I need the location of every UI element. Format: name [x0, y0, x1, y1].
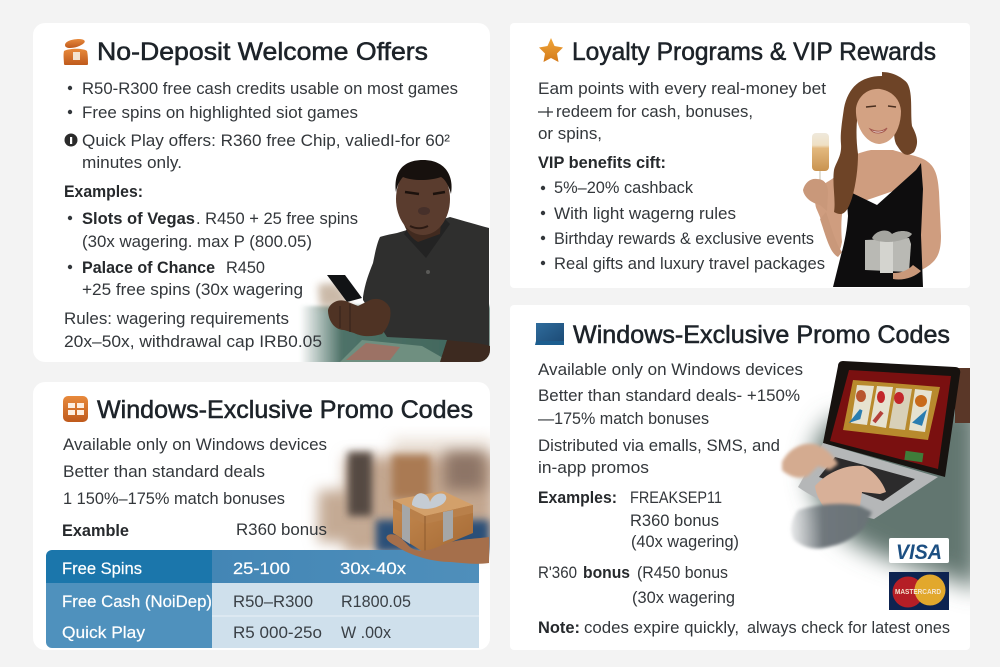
VIP benefits list: VIP benefits cift: [538, 154, 666, 172]
VIP benefits list [538, 154, 825, 273]
table row: free spins: 25-100 [233, 559, 290, 578]
icon: orange windows tile [63, 396, 88, 422]
VIP benefits list: Birthday rewards & exclusive events [554, 230, 814, 248]
title: Loyalty Programs & VIP Rewards [572, 38, 936, 66]
examples: R'360 [538, 564, 577, 582]
table row: free spins [62, 559, 407, 578]
quick play note: Quick Play offers: R360 free Chip, valiedI-for 60² [82, 132, 451, 150]
examples: FREAKSEP11 [630, 489, 722, 507]
note [538, 619, 950, 637]
icon: orange cash pouch [64, 39, 88, 65]
illustration: blurred room background [318, 438, 495, 552]
panel: loyalty programs and VIP rewards [510, 23, 970, 288]
illustration: woman with champagne and gift [803, 72, 941, 287]
title: No-Deposit Welcome Offers [97, 38, 428, 66]
examples: Slots of Vegas [82, 210, 195, 228]
example row [62, 521, 327, 540]
body copy: —175% match bonuses [538, 410, 709, 428]
example row: R360 bonus [236, 521, 327, 539]
examples: Examples: [64, 183, 143, 201]
table row: free cash: R50–R300 [233, 593, 313, 611]
bullet list: Free spins on highlighted siot games [82, 104, 358, 122]
VIP benefits list: With light wagerng rules [554, 205, 736, 223]
icon: info badge [64, 134, 78, 146]
examples [538, 489, 739, 607]
earn points copy [538, 80, 826, 143]
body copy: Available only on Windows devices [63, 436, 327, 454]
examples: (30x wagering. max P (800.05) [82, 233, 312, 251]
examples: bonus [583, 564, 630, 582]
VIP benefits list: 5%–20% cashback [554, 179, 694, 197]
illustration: man using phone at card table [300, 160, 490, 366]
body copy: in-app promos [538, 459, 649, 477]
earn points copy: redeem for cash, bonuses, [556, 103, 753, 121]
bullet list [68, 80, 458, 122]
earn points copy: or spins, [538, 125, 602, 143]
table row: free cash: Free Cash (NoiDep) [62, 592, 212, 611]
body copy [63, 436, 327, 508]
note: always check for latest ones [747, 619, 950, 637]
body copy: Better than standard deals [63, 463, 265, 481]
body copy: Distributed via emalls, SMS, and [538, 437, 780, 455]
table [46, 550, 479, 648]
VIP benefits list: Real gifts and luxury travel packages [554, 255, 825, 273]
examples: . R450 + 25 free spins [196, 210, 358, 228]
rules: 20x–50x, withdrawal cap IRB0.05 [64, 333, 322, 351]
body copy [538, 361, 803, 477]
note: Note: [538, 619, 580, 637]
rules [64, 310, 322, 351]
table row: quick play: Quick Play [62, 623, 146, 642]
examples: (30x wagering [632, 589, 735, 607]
title: Windows-Exclusive Promo Codes [573, 321, 950, 349]
examples: +25 free spins (30x wagering [82, 281, 303, 299]
table row: quick play: W .00x [341, 624, 392, 642]
examples: R450 [226, 259, 265, 277]
example row: Examble [62, 522, 129, 540]
table row: quick play: R5 000-25o [233, 624, 322, 642]
panel: no-deposit welcome offers [33, 23, 490, 366]
icon: blue laptop [535, 323, 564, 345]
body copy: Better than standard deals- +150% [538, 387, 800, 405]
examples: Palace of Chance [82, 259, 215, 277]
icon: gold star [539, 38, 563, 62]
table row: free spins: 30x-40x [340, 559, 407, 578]
panel: windows-exclusive promo codes with table [33, 382, 495, 650]
body copy: 1 150%–175% match bonuses [63, 490, 285, 508]
icon: mastercard [889, 572, 949, 610]
note: codes expire quickly, [584, 619, 739, 637]
table row: quick play [62, 623, 392, 642]
title: Windows-Exclusive Promo Codes [97, 396, 473, 424]
panel: windows-exclusive promo codes with laptop [510, 305, 980, 650]
earn points copy: Eam points with every real-money bet [538, 80, 826, 98]
quick play note: minutes only. [82, 154, 182, 172]
illustration: hands on laptop with slot game [782, 361, 980, 590]
table row: free cash [62, 592, 411, 611]
examples: (R450 bonus [637, 564, 728, 582]
examples: R360 bonus [630, 512, 719, 530]
quick play note [82, 132, 451, 172]
body copy: Available only on Windows devices [538, 361, 803, 379]
examples: Examples: [538, 489, 617, 507]
icon: mastercard: MASTERCARD [895, 589, 941, 596]
bullet list: R50-R300 free cash credits usable on most games [82, 80, 458, 98]
table row: free spins: Free Spins [62, 559, 142, 578]
examples: (40x wagering) [631, 533, 739, 551]
examples [64, 183, 358, 299]
illustration: hand holding gift box [386, 491, 489, 564]
table row: free cash: R1800.05 [341, 593, 411, 611]
icon: visa card: VISA [896, 541, 942, 564]
rules: Rules: wagering requirements [64, 310, 289, 328]
